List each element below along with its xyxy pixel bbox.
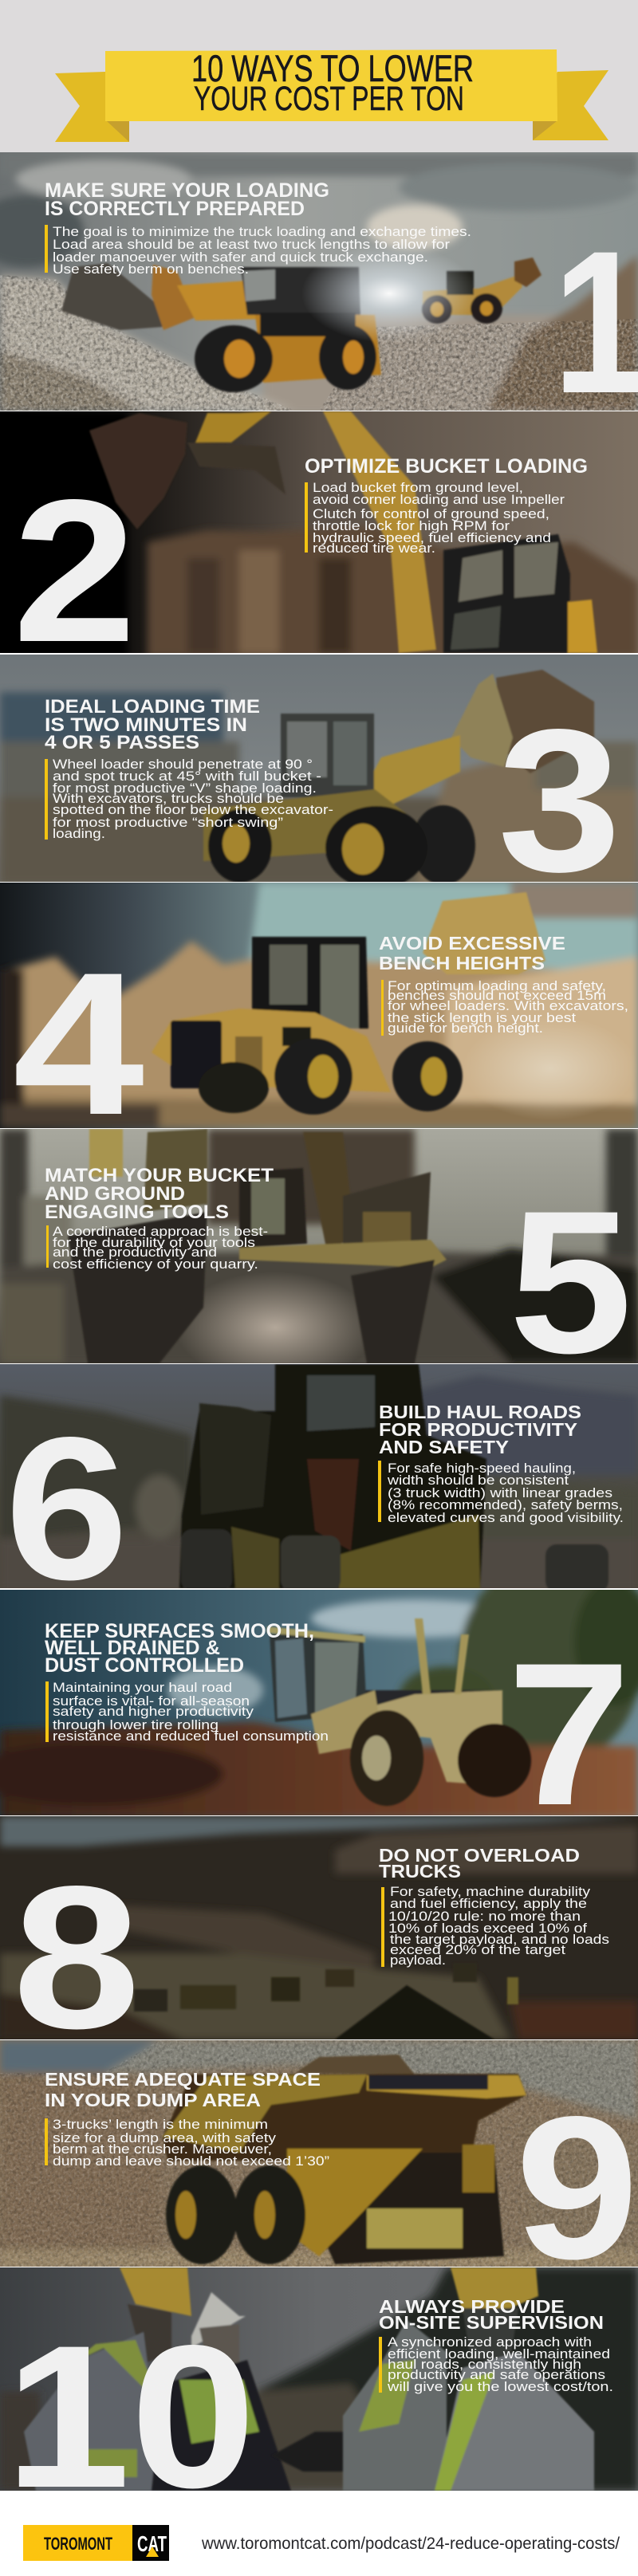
accent bar: [45, 1681, 49, 1742]
banner right fold: [533, 121, 557, 140]
body text: avoid corner loading and use Impeller: [313, 493, 565, 507]
dark spoil heap: [335, 1985, 494, 2039]
heading: BENCH HEIGHTS: [379, 953, 545, 973]
body text: A synchronized approach with: [388, 2335, 592, 2350]
heading: FOR PRODUCTIVITY: [379, 1419, 577, 1440]
body text: With excavators, trucks should be: [53, 792, 284, 806]
heading: MATCH YOUR BUCKET: [45, 1165, 274, 1186]
body text: Maintaining your haul road: [53, 1681, 232, 1695]
body text: elevated curves and good visibility.: [388, 1511, 624, 1525]
heading: IDEAL LOADING TIME: [45, 696, 260, 718]
heading: MAKE SURE YOUR LOADING: [45, 179, 329, 202]
body text: haul roads, consistently high: [388, 2358, 581, 2372]
heading: [379, 933, 565, 973]
body text: for wheel loaders. With excavators,: [388, 999, 628, 1013]
body text: Use safety berm on benches.: [53, 262, 249, 277]
heading: ENGAGING TOOLS: [45, 1201, 229, 1223]
body text: efficient loading, well-maintained: [388, 2347, 610, 2362]
body text: the stick length is your best: [388, 1011, 576, 1025]
heading: AND GROUND: [45, 1183, 185, 1205]
body text: cost efficiency of your quarry.: [53, 1257, 258, 1272]
body text: 10% of loads exceed 10% of: [388, 1921, 587, 1936]
body text: loader manoeuver with safer and quick truck exchange.: [53, 250, 428, 265]
body text: For optimum loading and safety,: [388, 979, 606, 993]
worker left: [24, 2267, 191, 2491]
body text: for the durability of your tools: [53, 1236, 255, 1250]
body text: (3 truck width) with linear grades: [388, 1486, 612, 1500]
light flare: [305, 250, 473, 340]
body text: 10/10/20 rule: no more than: [388, 1909, 581, 1924]
photo: open pit mine with trucks: [0, 1816, 638, 2039]
body text: benches should not exceed 15m: [388, 989, 606, 1003]
footer URL: www.toromontcat.com/podcast/24-reduce-operating-costs/: [201, 2535, 620, 2553]
number 4: 4: [13, 930, 144, 1158]
excavator: [89, 411, 597, 653]
body text: spotted on the floor below the excavator-: [53, 803, 333, 817]
haul trucks: [134, 1963, 518, 2012]
panel 7: surfaces: [0, 1590, 638, 1815]
title text: YOUR COST PER TON: [194, 80, 464, 118]
body text: Load bucket from ground level,: [313, 481, 523, 495]
number 6: 6: [5, 1395, 128, 1622]
heading: [379, 1402, 581, 1457]
panel 10: supervision: [0, 2267, 638, 2531]
footer logo: Toromont CAT: TOROMONT: [44, 2534, 112, 2554]
body text: resistance and reduced fuel consumption: [53, 1729, 329, 1744]
body text: size for a dump area, with safety: [53, 2131, 277, 2145]
number 9: 9: [515, 2075, 638, 2302]
photo: site supervisors in hi-vis: [0, 2267, 638, 2491]
number 7: 7: [507, 1621, 631, 1848]
body text: and spot truck at 45° with full bucket -: [53, 769, 321, 784]
heading: [45, 179, 329, 220]
photo: excavator at rock face: [0, 411, 638, 659]
banner left fold: [107, 121, 129, 142]
body text: payload.: [390, 1953, 446, 1968]
heading: [45, 1165, 274, 1223]
accent bar: [378, 1461, 381, 1522]
banner face: [105, 49, 557, 121]
wheel loader: [203, 670, 594, 889]
heading: 4 OR 5 PASSES: [45, 732, 199, 753]
panel 8: overloading: [0, 1816, 638, 2039]
title text: [191, 47, 474, 118]
title text: 10 WAYS TO LOWER: [191, 47, 474, 89]
panel 1: loading preparation: [0, 152, 638, 436]
body text: [387, 1461, 624, 1525]
body text: 3-trucks’ length is the minimum: [53, 2118, 268, 2132]
accent bar: [45, 759, 48, 840]
number 3: 3: [498, 687, 621, 914]
body text: the target payload, and no loads: [390, 1933, 609, 1947]
panel 6: haul roads: [0, 1364, 638, 1588]
panel 3: ideal loading time: [0, 655, 638, 882]
body text: [53, 1681, 329, 1744]
body text: dump and leave should not exceed 1’30”: [53, 2154, 329, 2169]
heading: AND SAFETY: [379, 1437, 509, 1457]
heading: DUST CONTROLLED: [45, 1654, 244, 1677]
photo: wheel loaders on gravel: [0, 152, 638, 415]
photo: excavator in dust: [0, 1129, 638, 1383]
body text: Wheel loader should penetrate at 90 °: [53, 757, 313, 772]
body text: and fuel efficiency, apply the: [390, 1897, 587, 1911]
heading: IS CORRECTLY PREPARED: [45, 198, 305, 220]
heading: IN YOUR DUMP AREA: [45, 2090, 261, 2110]
photo: wheel loader dumping: [0, 655, 638, 889]
workers right: [343, 2267, 594, 2491]
number 8: 8: [13, 1844, 140, 2071]
body text: [53, 2118, 329, 2169]
accent bar: [381, 980, 384, 1036]
banner left tail: [55, 72, 129, 142]
accent bar: [45, 225, 48, 273]
excavator: [68, 1129, 447, 1363]
heading: OPTIMIZE BUCKET LOADING: [305, 455, 588, 478]
body text: through lower tire rolling: [53, 1718, 219, 1732]
body text: for most productive “V” shape loading.: [53, 781, 317, 796]
body text: Load area should be at least two truck lengths to allow for: [53, 238, 451, 252]
panel 4: bench heights: [0, 883, 638, 1128]
heading: [45, 696, 260, 753]
body text: loading.: [53, 827, 105, 841]
photo: wheel loader at sand pile: [0, 883, 638, 1128]
panel 2: bucket loading: [0, 411, 638, 653]
wheel loader: [152, 892, 545, 1115]
body text: productivity and safe operations: [388, 2368, 605, 2382]
heading: DO NOT OVERLOAD: [379, 1845, 580, 1866]
accent bar: [379, 2337, 382, 2393]
body text: hydraulic speed, fuel efficiency and: [313, 531, 551, 545]
heading: ENSURE ADEQUATE SPACE: [45, 2069, 321, 2090]
heading: [379, 2296, 604, 2333]
motor grader: [267, 1618, 531, 1806]
body text: [53, 1225, 268, 1272]
body text: [387, 2335, 613, 2394]
body text: [53, 225, 471, 277]
footer logo: Toromont CAT: CAT: [137, 2531, 167, 2556]
body text: berm at the crusher. Manoeuver,: [53, 2142, 272, 2157]
body text: [388, 1885, 609, 1968]
heading: [45, 1620, 314, 1677]
number 10: 10: [5, 2303, 256, 2531]
banner right tail: [533, 70, 608, 140]
heading: AVOID EXCESSIVE: [379, 933, 565, 954]
page background: [0, 0, 638, 152]
machine: [179, 1364, 608, 1592]
body text: [53, 757, 333, 841]
heading: [379, 1845, 580, 1882]
heading: ON-SITE SUPERVISION: [379, 2312, 604, 2333]
heading: ALWAYS PROVIDE: [379, 2296, 565, 2317]
heading: [45, 2069, 321, 2110]
body text: (8% recommended), safety berms,: [388, 1498, 623, 1512]
body text: and the productivity and: [53, 1245, 217, 1260]
accent bar: [305, 482, 308, 553]
body text: For safe high-speed hauling,: [388, 1461, 576, 1476]
clipboard: [271, 2432, 411, 2472]
body text: surface is vital- for all-season: [53, 1694, 250, 1709]
body text: safety and higher productivity: [53, 1705, 254, 1719]
heading: TRUCKS: [379, 1861, 461, 1882]
body text: will give you the lowest cost/ton.: [387, 2380, 613, 2394]
panel 5: bucket and ground engaging tools: [0, 1129, 638, 1363]
body text: exceed 20% of the target: [390, 1943, 565, 1957]
photo: motor grader on red earth: [0, 1590, 638, 1815]
footer background: [0, 2491, 638, 2576]
body text: The goal is to minimize the truck loading and exchange times.: [53, 225, 471, 239]
title banner: [55, 47, 608, 142]
footer logo: Toromont CAT: [23, 2525, 169, 2561]
main wheel loader: [61, 263, 381, 392]
heading: IS TWO MINUTES IN: [45, 714, 247, 736]
panel 9: dump area: [0, 2040, 638, 2302]
body text: [313, 481, 565, 556]
body text: for most productive “short swing”: [53, 816, 283, 830]
distant wheel loader: [422, 258, 542, 324]
body text: For safety, machine durability: [390, 1885, 591, 1899]
photo: mining truck: [0, 2040, 638, 2269]
accent bar: [381, 1887, 384, 1967]
body text: A coordinated approach is best-: [53, 1225, 268, 1239]
mining truck: [163, 2055, 526, 2264]
photo: dark machine front view: [0, 1364, 638, 1592]
heading: KEEP SURFACES SMOOTH,: [45, 1620, 314, 1642]
body text: width should be consistent: [387, 1473, 569, 1488]
accent bar: [45, 2118, 48, 2165]
body text: Clutch for control of ground speed,: [313, 507, 549, 521]
body text: [388, 979, 628, 1036]
body text: throttle lock for high RPM for: [313, 519, 510, 533]
body text: guide for bench height.: [388, 1021, 543, 1036]
heading: BUILD HAUL ROADS: [379, 1402, 581, 1422]
heading: WELL DRAINED &: [45, 1637, 220, 1659]
number 5: 5: [509, 1169, 632, 1396]
accent bar: [46, 1225, 49, 1268]
worker centre: [152, 2292, 291, 2491]
number 2: 2: [13, 458, 136, 685]
body text: reduced tire wear.: [313, 541, 435, 556]
